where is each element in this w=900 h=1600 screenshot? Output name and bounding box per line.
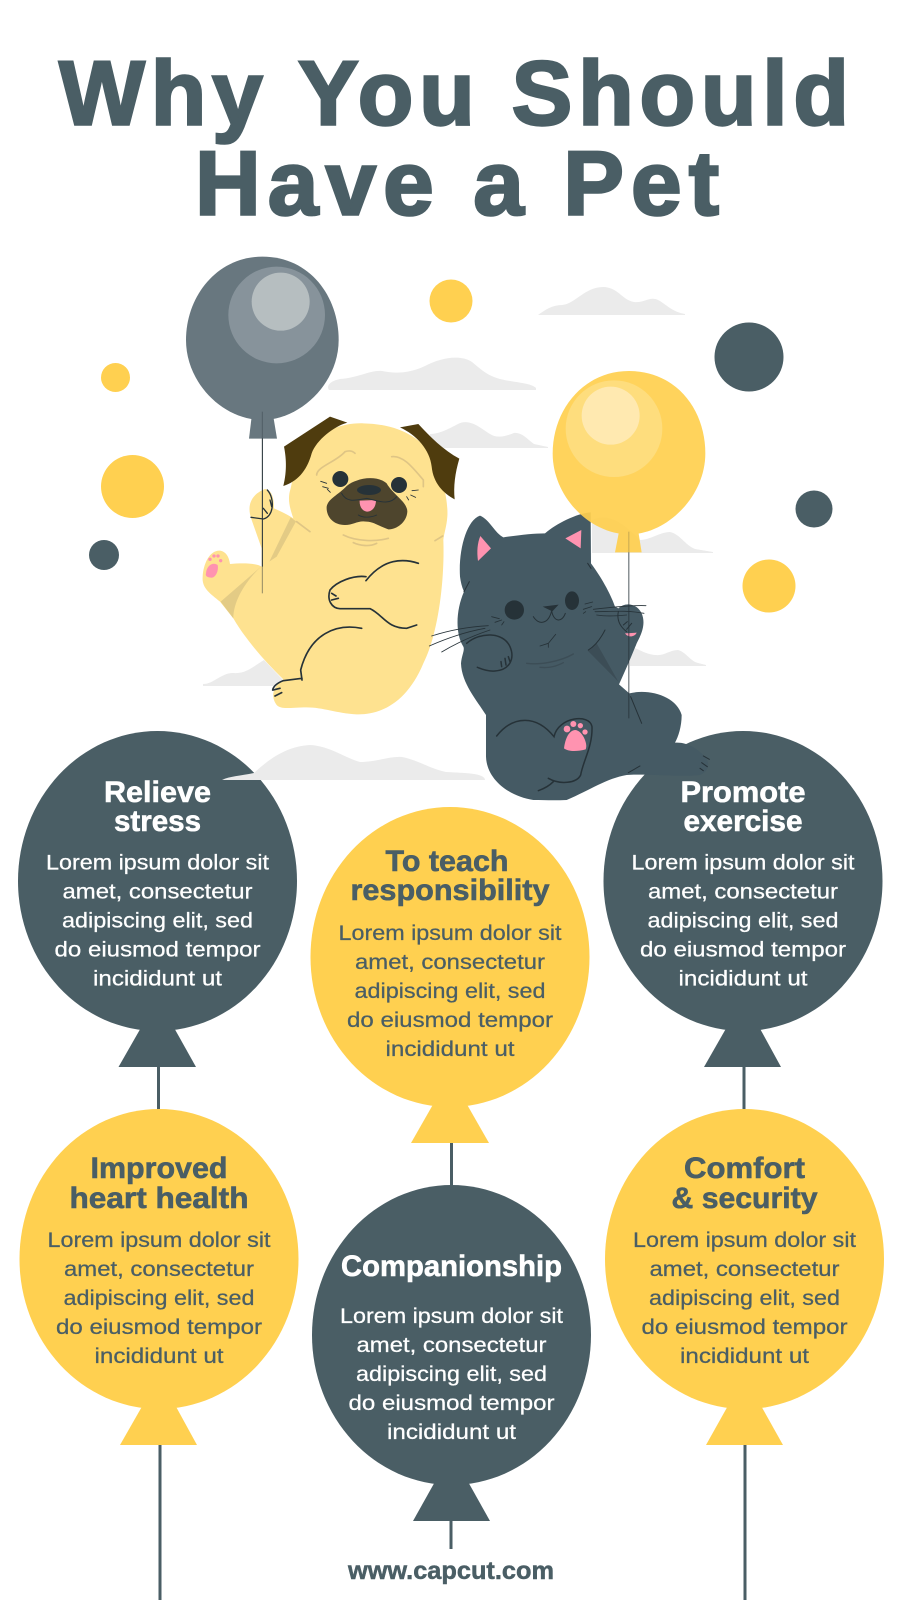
balloon panel: companionship: amet, consectetur xyxy=(356,1334,546,1357)
cat face xyxy=(429,591,646,652)
balloon panel: comfort and security: do eiusmod tempor xyxy=(642,1316,848,1339)
balloon panel: comfort and security: & security xyxy=(672,1182,818,1215)
balloon panel: improved heart health: heart health xyxy=(70,1182,248,1215)
balloon panel: improved heart health: Improved xyxy=(90,1152,228,1185)
balloon panel: to teach responsibility: adipiscing elit, sed xyxy=(354,980,546,1003)
pug ears xyxy=(283,417,459,499)
promote exercise text: incididunt ut xyxy=(678,968,808,990)
promote exercise text: do eiusmod tempor xyxy=(640,938,846,962)
balloon panel: improved heart health: do eiusmod tempor xyxy=(56,1316,262,1339)
balloon panel: comfort and security: Lorem ipsum dolor sit xyxy=(633,1229,856,1252)
balloon panel: companionship: Lorem ipsum dolor sit xyxy=(340,1305,563,1328)
illustration: cat with yellow balloon xyxy=(429,371,709,800)
balloon panel: companionship: incididunt ut xyxy=(387,1421,516,1444)
pug arm and leg shading xyxy=(221,517,296,618)
illustration: pug with gray balloon xyxy=(186,257,459,714)
balloon panel: to teach responsibility xyxy=(310,807,590,1186)
balloon panel: comfort and security: incididunt ut xyxy=(680,1345,809,1368)
balloon panel: to teach responsibility: incididunt ut xyxy=(386,1038,515,1061)
balloon panel: to teach responsibility: To teach xyxy=(386,845,508,878)
pug body xyxy=(203,423,447,714)
balloon panel: to teach responsibility: do eiusmod tempor xyxy=(347,1009,553,1032)
balloon panel: relieve stress: adipiscing elit, sed xyxy=(62,910,253,932)
balloon string xyxy=(628,532,629,718)
balloon panel: companionship: Companionship xyxy=(341,1250,562,1283)
balloon panel: comfort and security: adipiscing elit, sed xyxy=(649,1287,840,1310)
balloon panel: companionship: adipiscing elit, sed xyxy=(356,1363,547,1386)
gray balloon xyxy=(186,257,339,439)
balloon panel: comfort and security: Comfort xyxy=(684,1152,805,1185)
promote exercise text: amet, consectetur xyxy=(648,880,838,904)
balloon panel: improved heart health: amet, consectetur xyxy=(64,1258,254,1281)
balloon panel: to teach responsibility: amet, consectetur xyxy=(355,951,545,974)
decorative dots xyxy=(89,280,832,612)
balloon panel: relieve stress: amet, consectetur xyxy=(62,880,252,904)
balloon panel: relieve stress: stress xyxy=(114,805,201,838)
title: Why You Should xyxy=(59,44,849,144)
balloon panel: improved heart health: adipiscing elit, sed xyxy=(64,1287,254,1310)
promote exercise text: adipiscing elit, sed xyxy=(648,910,838,932)
balloon panel: comfort and security: amet, consectetur xyxy=(650,1258,840,1281)
promote exercise text: Promote xyxy=(680,776,806,809)
promote exercise text: exercise xyxy=(684,805,802,838)
pug face xyxy=(317,451,423,529)
promote exercise text xyxy=(632,776,855,990)
background clouds xyxy=(203,287,713,780)
balloon panel: comfort and security xyxy=(605,1109,884,1600)
balloon panel: to teach responsibility: responsibility xyxy=(350,874,550,907)
title xyxy=(59,44,849,234)
cat ears inner xyxy=(477,530,581,561)
balloon panel: companionship: do eiusmod tempor xyxy=(348,1392,555,1415)
balloon panel: to teach responsibility: Lorem ipsum dolor sit xyxy=(338,922,562,945)
cat body xyxy=(458,512,708,800)
balloon panel: relieve stress: Relieve xyxy=(104,776,211,809)
pug paw and body lines xyxy=(206,490,443,696)
cat arm and foot details xyxy=(464,563,709,791)
website footer: www.capcut.com xyxy=(347,1557,554,1585)
yellow balloon xyxy=(553,371,705,552)
promote exercise text: Lorem ipsum dolor sit xyxy=(632,852,855,874)
balloon panel: relieve stress: do eiusmod tempor xyxy=(54,938,261,962)
balloon panel: relieve stress: Lorem ipsum dolor sit xyxy=(46,852,269,874)
balloon panel: relieve stress: incididunt ut xyxy=(93,968,222,990)
balloon panel: improved heart health: Lorem ipsum dolor sit xyxy=(48,1229,271,1252)
balloon panel: relieve stress xyxy=(18,731,297,1110)
balloon panel: promote exercise xyxy=(604,731,882,1110)
balloon panel: improved heart health xyxy=(20,1109,298,1600)
balloon string xyxy=(262,412,263,593)
title: Have a Pet xyxy=(195,134,719,234)
balloon panel: companionship xyxy=(312,1185,591,1549)
balloon panel: improved heart health: incididunt ut xyxy=(94,1345,224,1368)
